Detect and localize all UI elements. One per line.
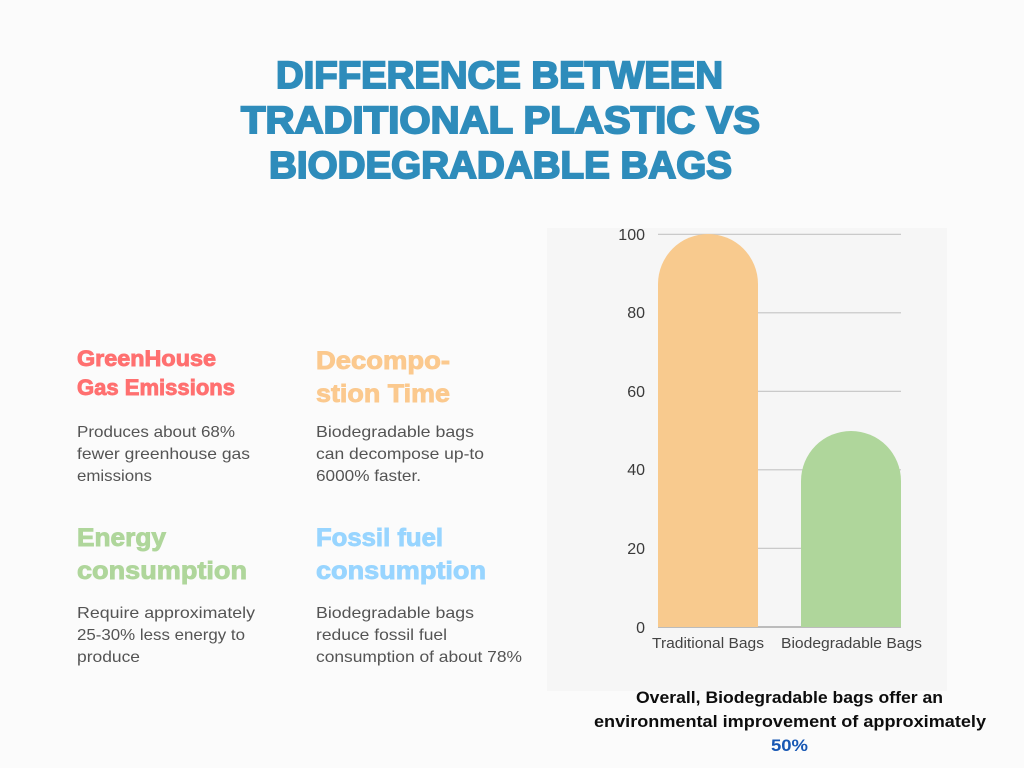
- x axis labels: Traditional Bags: [652, 635, 764, 652]
- text: energy description: [77, 605, 255, 666]
- heading: decomposition time: Decompo-: [316, 347, 450, 375]
- heading: greenhouse gas emissions: GreenHouse: [77, 346, 216, 371]
- y axis labels: 40: [627, 462, 645, 479]
- heading: energy consumption: consumption: [77, 557, 247, 585]
- heading: fossil fuel consumption: [316, 524, 486, 585]
- text: fossil fuel description: reduce fossil fuel: [316, 627, 447, 644]
- title: TRADITIONAL PLASTIC VS: [241, 100, 760, 142]
- y axis labels: 60: [627, 384, 645, 401]
- text: fossil fuel description: [316, 605, 522, 666]
- heading: greenhouse gas emissions: Gas Emissions: [77, 375, 235, 400]
- callout: overall conclusion: Overall, Biodegradable bags offer an: [636, 688, 943, 707]
- text: decomposition description: 6000% faster.: [316, 468, 421, 485]
- bar: traditional bags: [658, 234, 758, 627]
- text: greenhouse gas description: fewer greenhouse gas: [77, 446, 250, 463]
- y axis labels: 100: [618, 227, 645, 244]
- heading: energy consumption: Energy: [77, 524, 166, 552]
- panel: greenhouse gas emissions: [77, 346, 250, 485]
- y axis labels: [618, 227, 645, 637]
- heading: decomposition time: stion Time: [316, 380, 450, 408]
- text: greenhouse gas description: Produces about 68%: [77, 424, 235, 441]
- y axis labels: 0: [636, 620, 645, 637]
- callout: overall conclusion: [594, 688, 987, 755]
- heading: fossil fuel consumption: consumption: [316, 557, 486, 585]
- bar: biodegradable bags: [801, 431, 901, 627]
- text: energy description: produce: [77, 649, 140, 666]
- panel: fossil fuel consumption: [316, 524, 522, 666]
- text: fossil fuel description: consumption of about 78%: [316, 649, 522, 666]
- heading: greenhouse gas emissions: [77, 346, 235, 400]
- text: energy description: Require approximately: [77, 605, 255, 622]
- panel: energy consumption: [77, 524, 255, 666]
- text: energy description: 25-30% less energy to: [77, 627, 245, 644]
- heading: decomposition time: [316, 347, 450, 408]
- bar chart: [547, 227, 947, 691]
- callout: overall conclusion: 50%: [771, 736, 808, 755]
- x axis labels: Biodegradable Bags: [781, 635, 922, 652]
- title: BIODEGRADABLE BAGS: [269, 145, 732, 187]
- text: decomposition description: can decompose up-to: [316, 446, 484, 463]
- title: DIFFERENCE BETWEEN: [276, 55, 723, 97]
- panel: decomposition time: [316, 347, 484, 485]
- heading: energy consumption: [77, 524, 247, 585]
- text: fossil fuel description: Biodegradable bags: [316, 605, 474, 622]
- y axis labels: 20: [627, 541, 645, 558]
- text: decomposition description: [316, 424, 484, 485]
- title: [241, 55, 760, 187]
- text: greenhouse gas description: [77, 424, 250, 485]
- text: greenhouse gas description: emissions: [77, 468, 152, 485]
- heading: fossil fuel consumption: Fossil fuel: [316, 524, 443, 552]
- callout: overall conclusion: environmental improvement of approximately: [594, 712, 987, 731]
- y axis labels: 80: [627, 305, 645, 322]
- text: decomposition description: Biodegradable bags: [316, 424, 474, 441]
- x axis labels: [652, 635, 922, 652]
